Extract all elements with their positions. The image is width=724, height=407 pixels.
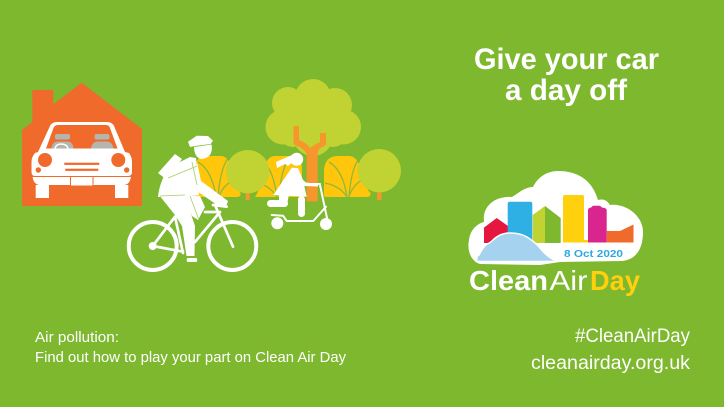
wordmark (469, 265, 640, 296)
house (22, 83, 142, 206)
caption text: Find out how to play your part on Clean Air Day (35, 350, 347, 366)
logo: Clean Air Day (468, 171, 643, 296)
date: 8 Oct 2020 (564, 248, 623, 260)
orange block (607, 224, 634, 242)
torso (158, 157, 199, 197)
arm (187, 162, 228, 207)
wordmark: Clean (469, 265, 548, 296)
icon: house with car (22, 83, 142, 206)
green block (545, 206, 561, 243)
backpack (158, 154, 182, 180)
rider (158, 136, 228, 256)
house block (484, 218, 508, 243)
bush leaves (196, 158, 362, 197)
hashtag and website: #CleanAirDay (575, 325, 690, 347)
cloud (468, 171, 643, 265)
hashtag and website (531, 325, 690, 374)
caption text: Air pollution: (35, 330, 119, 346)
child (267, 153, 318, 217)
icon: cyclist (129, 136, 256, 270)
small tree right (358, 149, 401, 200)
bent leg (172, 194, 205, 220)
scooter (272, 184, 327, 221)
lime block (533, 206, 545, 243)
helmet (188, 136, 213, 147)
icon: child on scooter (267, 153, 332, 230)
park scenery (194, 79, 401, 202)
wordmark: Air (550, 265, 588, 296)
heading: a day off (505, 74, 628, 107)
pale blue cloud (477, 233, 557, 262)
car (32, 122, 132, 198)
big tree (266, 79, 361, 202)
head (194, 144, 212, 159)
yellow bush right (324, 156, 371, 197)
caption text (35, 330, 347, 366)
yellow bush middle (255, 156, 302, 197)
straight leg (159, 195, 195, 256)
yellow bush left (194, 156, 241, 197)
magenta block (588, 206, 607, 242)
blue block (508, 202, 532, 242)
heading: Give your car (474, 43, 659, 76)
bicycle (129, 205, 256, 270)
heading (474, 43, 659, 107)
yellow block (563, 195, 592, 242)
wordmark: Day (590, 265, 640, 296)
small tree left (226, 150, 269, 200)
hashtag and website: cleanairday.org.uk (531, 352, 690, 374)
